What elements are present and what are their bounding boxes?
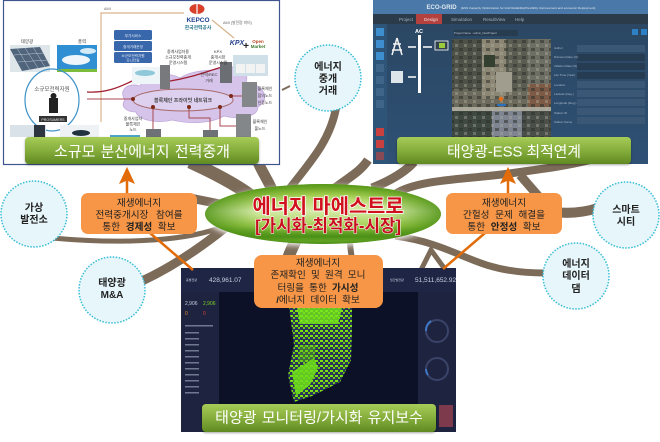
circle: solar M&A: 태양광 bbox=[98, 276, 126, 289]
banner: small-scale energy brokerage: 소규모 분산에너지 전력중개 bbox=[54, 144, 230, 160]
app title: ECO-GRID (ESS Capacity Optimization for Grid Reliability/Flexibility Improvement and economic Deployment) bbox=[427, 0, 595, 13]
diagram labels: 블록체인 bbox=[253, 118, 268, 124]
title: 에너지 마에스트로 bbox=[252, 196, 404, 218]
system diagram: AC bbox=[415, 29, 423, 35]
callout: visibility and data: /에너지 데이터 확보 bbox=[276, 294, 360, 306]
satellite map bbox=[452, 39, 551, 164]
blockchain private network cloud: 블록체인 프라이빗 네트워크 bbox=[154, 97, 212, 104]
form fields: Inflation Rate (%) bbox=[554, 64, 577, 68]
banner: monitoring bbox=[202, 404, 436, 432]
dashboard figures: 0 bbox=[203, 311, 206, 317]
small power resources circle: PROSUMERS bbox=[41, 118, 65, 122]
callout: visibility and data bbox=[254, 255, 383, 308]
diagram labels: 블록체인 bbox=[258, 85, 273, 91]
circle: smart city: 스마트 bbox=[612, 203, 640, 216]
KPX and Open Market logos: KPX bbox=[230, 40, 246, 47]
dashboard figures: 2,906 bbox=[203, 301, 216, 307]
dashboard figures bbox=[185, 277, 456, 317]
circle: solar M&A bbox=[79, 257, 145, 323]
brokerage system and servers bbox=[110, 55, 268, 138]
network links and nodes bbox=[87, 94, 245, 135]
red arrow bbox=[87, 67, 222, 92]
dashboard figures: 51,511,652.92 bbox=[415, 277, 456, 284]
icon: KEPCO logo: 한국전력공사 bbox=[185, 24, 212, 31]
diagram labels: 블록체인 bbox=[126, 120, 141, 126]
callout: stability: 통한 안정성 확보 bbox=[467, 221, 541, 233]
diagram labels: 운영시스템 bbox=[169, 59, 188, 65]
service stack: 모니터링 bbox=[126, 58, 140, 62]
callout: stability: 재생에너지 bbox=[482, 198, 526, 209]
banner: monitoring: 태양광 모니터링/가시화 유지보수 bbox=[215, 410, 423, 426]
diagram labels: KPX bbox=[214, 49, 222, 54]
sidebar icons bbox=[373, 24, 387, 164]
circle: energy brokerage trading: 거래 bbox=[319, 84, 337, 97]
diagram labels: 거래 bbox=[205, 77, 213, 83]
callout: economic feasibility: 재생에너지 bbox=[117, 198, 161, 209]
form fields: Station ID bbox=[554, 111, 568, 115]
service stack: 중개거래운영 bbox=[123, 44, 143, 49]
diagram labels: 인증노드 bbox=[258, 99, 273, 105]
icon: KEPCO logo: KEPCO bbox=[186, 17, 210, 24]
central title ellipse bbox=[205, 184, 441, 244]
form fields bbox=[554, 29, 647, 124]
AMI labels bbox=[104, 7, 253, 25]
arrow: right callout to ESS panel bbox=[443, 168, 515, 269]
callout: visibility and data: 재생에너지 bbox=[296, 258, 340, 269]
dashboard figures: 월간발전량 bbox=[390, 277, 404, 282]
diagram labels: 풀노드 bbox=[254, 126, 266, 131]
form fields: Life Time (Year) bbox=[554, 73, 575, 77]
station list bbox=[185, 325, 213, 394]
callout: economic feasibility: 통한 경제성 확보 bbox=[102, 221, 176, 233]
dashboard figures: 428,961.07 bbox=[209, 277, 242, 284]
KPX and Open Market logos bbox=[230, 39, 266, 52]
panel: solar monitoring dashboard bbox=[181, 268, 456, 432]
diagram labels: 합의노드 bbox=[258, 92, 273, 98]
callout: visibility and data: 터링을 통한 가시성 bbox=[278, 282, 358, 294]
right gauges bbox=[426, 320, 453, 427]
service stack: 소규모전력자원 bbox=[121, 53, 145, 58]
circle: smart city bbox=[593, 182, 659, 248]
form fields: Station Name bbox=[554, 120, 573, 124]
menu tabs: Simulation bbox=[451, 17, 473, 22]
diagram labels: 운영시스템 bbox=[209, 59, 228, 65]
map of Korea with solar sites bbox=[288, 306, 352, 402]
menu tabs: ResultView bbox=[483, 17, 506, 22]
diagram labels: 전력/REC bbox=[201, 71, 218, 77]
callout: visibility and data: 존재확인 및 원격 모니 bbox=[271, 269, 365, 281]
form fields: Latitude (Deg.) bbox=[554, 92, 574, 96]
blockchain private network cloud bbox=[123, 67, 265, 123]
system diagram bbox=[391, 29, 448, 93]
callout: economic feasibility: 전력중개시장 참여를 bbox=[95, 209, 183, 221]
KPX and Open Market logos: Open bbox=[252, 39, 264, 44]
project name bbox=[454, 30, 518, 36]
form fields: Author bbox=[554, 46, 563, 50]
dashboard figures: 총발전량 bbox=[186, 277, 197, 282]
circle: energy data dam: 데이터 bbox=[562, 269, 590, 282]
service stack bbox=[114, 30, 152, 63]
AMI labels: AMI bbox=[104, 7, 111, 11]
callout: stability bbox=[446, 193, 562, 234]
circle: energy brokerage trading: 에너지 bbox=[314, 60, 342, 73]
circle: energy data dam bbox=[543, 243, 609, 309]
circle: energy data dam: 에너지 bbox=[562, 257, 590, 270]
icon: KEPCO logo bbox=[185, 3, 212, 31]
panel: small-scale distributed energy brokerage bbox=[4, 0, 280, 164]
panel: solar-ESS optimal link bbox=[373, 0, 648, 164]
dashboard figures: 2,906 bbox=[185, 301, 198, 307]
callout: economic feasibility bbox=[81, 193, 197, 234]
form fields: Discount Rate (%) bbox=[554, 55, 578, 59]
small power resources circle: 소규모전력자원 bbox=[34, 85, 70, 93]
KPX and Open Market logos: + bbox=[243, 41, 249, 52]
menu tabs: Project bbox=[399, 17, 414, 22]
banner: solar-ESS link bbox=[397, 137, 631, 164]
dashboard figures: 0 bbox=[185, 311, 188, 317]
tree branches bbox=[52, 86, 598, 281]
banner: solar-ESS link: 태양광-ESS 최적연계 bbox=[447, 144, 581, 160]
KPX and Open Market logos: Market bbox=[251, 44, 266, 49]
diagram labels: 중개사업자 bbox=[124, 115, 143, 121]
circle: virtual power plant: 발전소 bbox=[20, 214, 48, 226]
solar and wind photos bbox=[10, 38, 97, 72]
circle: virtual power plant: 가상 bbox=[25, 201, 43, 214]
menu tabs bbox=[399, 14, 525, 24]
project name: Project Name : admin_NewProject bbox=[454, 31, 497, 35]
circle: virtual power plant bbox=[1, 181, 67, 247]
diagram labels: 중개사업자용 bbox=[167, 48, 189, 54]
arrow: left callout to brokerage panel bbox=[120, 168, 193, 270]
circle: energy data dam: 댐 bbox=[571, 282, 581, 295]
subtitle: [가시화-최적화-시장] bbox=[255, 216, 401, 236]
diagram labels: 소규모전력중개 bbox=[165, 54, 191, 60]
AMI dashed connection lines bbox=[101, 13, 234, 122]
small power resources circle bbox=[25, 69, 79, 131]
diagram labels: 중개시장 bbox=[211, 54, 226, 60]
diagram labels: 노드 bbox=[129, 127, 137, 132]
battery and EV photos bbox=[10, 125, 99, 137]
circle: energy brokerage trading: 중개 bbox=[319, 72, 337, 85]
circle: energy brokerage trading bbox=[295, 45, 361, 111]
service stack: 부가서비스 bbox=[125, 33, 142, 38]
solar and wind photos: 풍력 bbox=[78, 38, 86, 45]
diagram labels bbox=[124, 48, 273, 132]
AMI labels: AMI (발전량 미터) bbox=[223, 20, 253, 25]
form fields: Longitude (Deg.) bbox=[554, 101, 576, 105]
solar and wind photos: 태양광 bbox=[21, 38, 33, 45]
menu tabs: Help bbox=[515, 17, 525, 22]
banner: small-scale energy brokerage bbox=[25, 137, 259, 164]
circle: solar M&A: M&A bbox=[101, 290, 123, 301]
menu tabs: Design bbox=[424, 17, 439, 22]
circle: smart city: 시티 bbox=[617, 216, 635, 228]
callout: stability: 간헐성 문제 해결을 bbox=[463, 209, 545, 221]
form fields: Location bbox=[554, 83, 566, 87]
